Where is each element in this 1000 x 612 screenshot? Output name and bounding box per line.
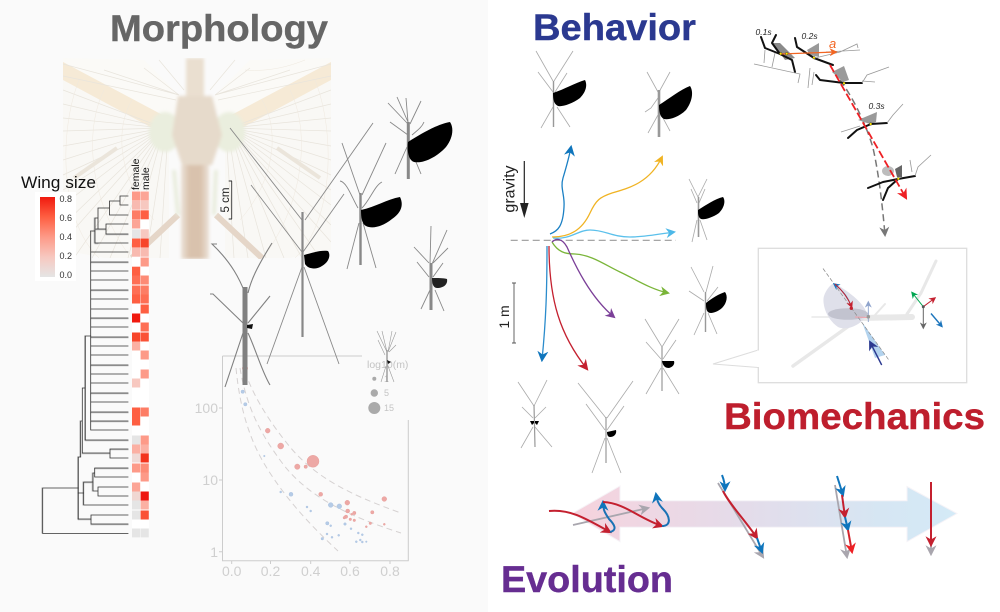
column labels: female, male: male xyxy=(140,167,152,190)
yellow centre of mass dots xyxy=(779,52,900,180)
icon: behavior insect 4 xyxy=(689,266,727,335)
axis labels: 100 xyxy=(195,400,218,416)
size legend: 15 xyxy=(384,403,394,413)
diagram: evolution trace 3, steep descent xyxy=(835,476,852,557)
axis labels: 0.6 xyxy=(340,563,360,579)
arrow: gravity xyxy=(502,161,529,218)
scatter plot: wing size vs body length xyxy=(195,356,410,579)
legend: wing size colour scale: Wing size xyxy=(21,173,96,192)
photo: insect wing specimen xyxy=(63,58,331,259)
force diagram at right xyxy=(912,292,942,328)
icon: behavior insect 7 xyxy=(578,381,633,473)
icon: tiny stick insect over legend xyxy=(377,331,396,382)
diagram: high-speed video frames of falling insect xyxy=(754,27,931,235)
legend: wing size colour scale: 0.6 xyxy=(60,213,72,223)
icon: behavior insect 2 xyxy=(645,72,692,137)
red data points xyxy=(242,366,387,528)
heatmap: wing size by species and sex xyxy=(130,158,152,538)
column labels: female, male xyxy=(130,158,152,190)
baseline: launch height dashed line xyxy=(511,239,676,241)
legend: wing size colour scale: 0.0 xyxy=(60,270,72,280)
diagram: evolution trace 2, oblique descent xyxy=(718,475,763,557)
panel: biomechanics close-up xyxy=(713,248,967,383)
legend: wing size colour scale: 0.8 xyxy=(60,194,72,204)
dashed fit curves xyxy=(236,368,401,551)
legend: wing size colour scale: 0.2 xyxy=(60,251,72,261)
trajectory: red acceleration arrow xyxy=(830,65,906,198)
trajectory: grey dashed path xyxy=(840,80,885,235)
legend: wing size colour scale: 0.4 xyxy=(60,232,72,242)
blue data points xyxy=(241,390,367,543)
insect silhouette xyxy=(793,261,936,366)
time labels: 0.1s xyxy=(756,27,772,37)
scale bar: 1 m: 1 m xyxy=(496,305,512,329)
time labels: 0.2s xyxy=(802,31,818,41)
size legend: 5 xyxy=(384,388,389,398)
axis labels: 1 xyxy=(210,544,218,560)
title: Evolution: Evolution xyxy=(501,559,673,600)
title: Behavior: Behavior xyxy=(533,7,696,48)
force arrows at wing xyxy=(834,284,882,365)
icon: stick insect, small wing, thick body xyxy=(210,243,272,387)
scale bar: 5 cm: 5 cm xyxy=(220,188,232,212)
time labels xyxy=(756,27,885,111)
axis labels: 0.0 xyxy=(222,563,242,579)
limbs: black xyxy=(761,35,915,200)
icon: behavior insect 6 xyxy=(518,380,552,448)
diagram: high-speed video frames of falling insect: a xyxy=(829,36,836,51)
airflow cone xyxy=(862,322,885,358)
title: Morphology: Morphology xyxy=(110,8,328,49)
chart: gliding trajectories xyxy=(542,147,674,369)
icon: behavior insect 1 xyxy=(536,51,586,128)
icon: stick insect, dark speckled wing xyxy=(414,226,448,311)
icon: stick insect, long legs, medium wing xyxy=(230,123,373,364)
arrow: gravity: gravity xyxy=(502,165,518,213)
icon: behavior insect 5 xyxy=(645,319,679,394)
scale bar: 5 cm xyxy=(220,181,232,219)
limbs: thin grey xyxy=(754,44,931,176)
size legend: 1 xyxy=(384,374,389,384)
diagram: evolution trace 1, spiral descent xyxy=(549,494,669,532)
phylogenetic tree xyxy=(42,196,128,534)
size legend: log10(m) xyxy=(367,359,408,371)
icon: stick insect, largest wing xyxy=(388,97,452,179)
wing disc xyxy=(823,283,867,328)
legend: wing size colour scale xyxy=(21,173,96,281)
axis labels: 0.4 xyxy=(301,563,321,579)
axis labels: 0.2 xyxy=(261,563,280,579)
title: Biomechanics: Biomechanics xyxy=(724,396,985,437)
scale bar: 1 m xyxy=(496,283,516,343)
diagram: evolution trace 4, vertical descent xyxy=(930,482,932,554)
icon: stick insect, large wing xyxy=(340,143,402,269)
arrow: evolutionary double-headed gradient arrow xyxy=(572,486,957,542)
icon: behavior insect 3 xyxy=(689,179,724,242)
axis labels xyxy=(195,400,400,579)
wings: translucent grey xyxy=(773,43,902,177)
column labels: female, male: female xyxy=(130,158,142,190)
size legend xyxy=(362,356,410,420)
arrow: acceleration a xyxy=(780,52,836,54)
time labels: 0.3s xyxy=(868,101,885,111)
axis labels: 0.8 xyxy=(380,563,400,579)
axis labels: 10 xyxy=(202,472,218,488)
